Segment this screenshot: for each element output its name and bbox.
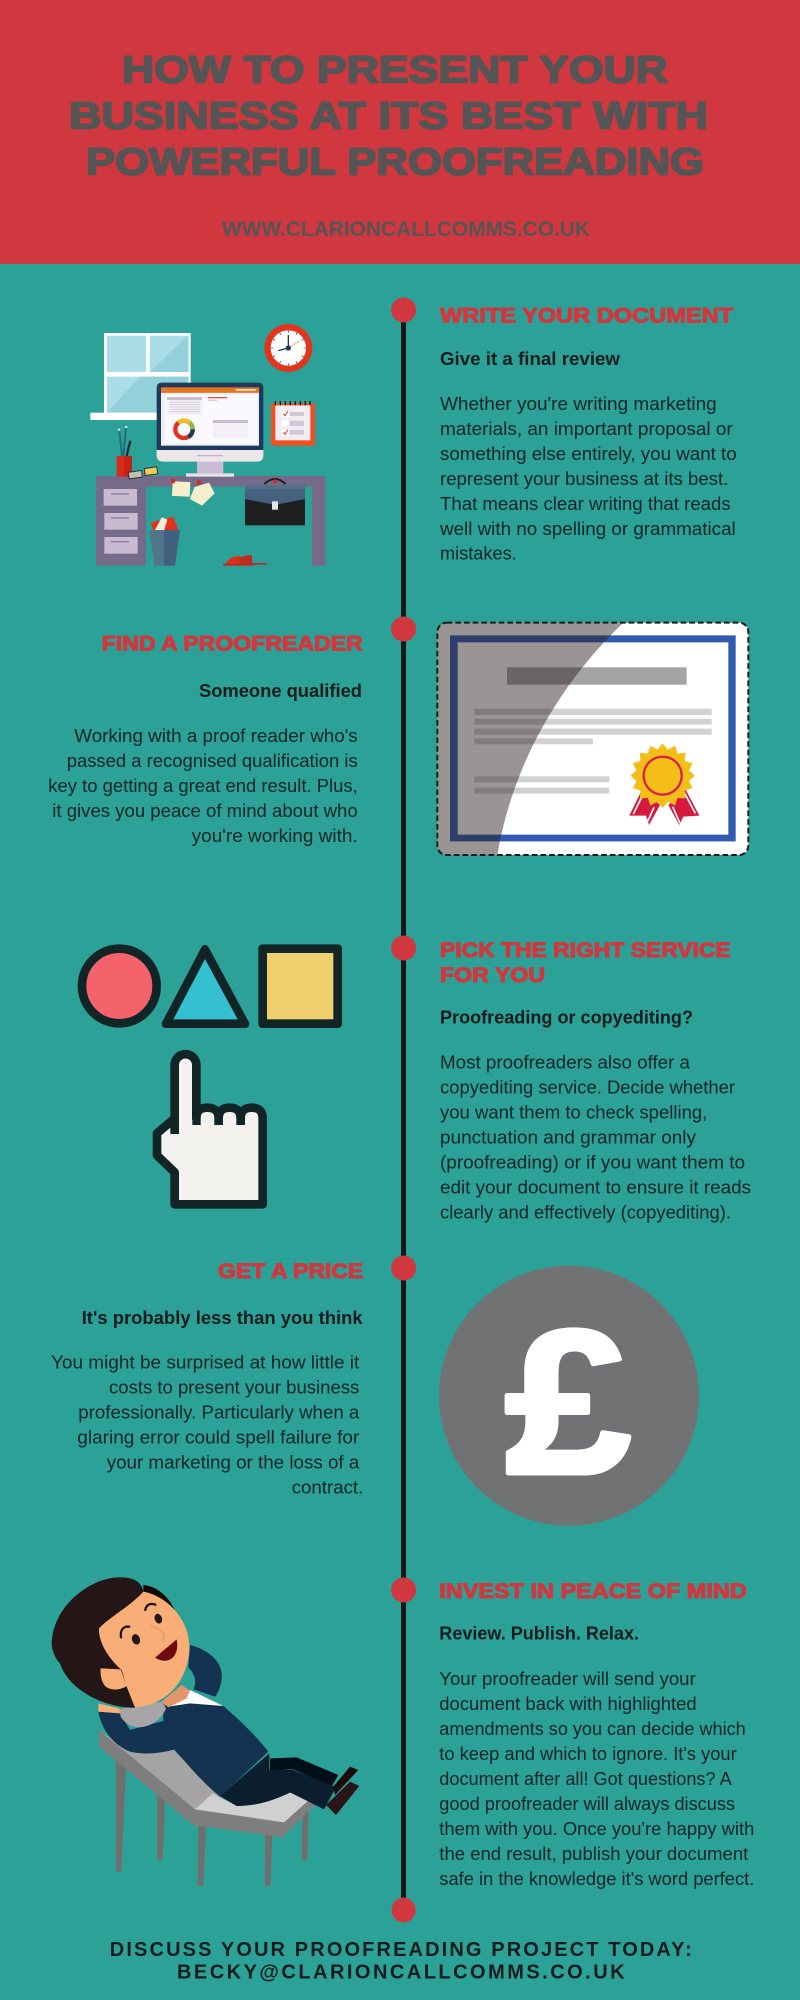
icon: certificate bbox=[437, 623, 748, 855]
icon: relaxed man on chair bbox=[52, 1577, 359, 1886]
heading: PICK THE RIGHT SERVICE bbox=[440, 938, 731, 962]
body text: your marketing or the loss of a bbox=[107, 1451, 360, 1472]
body text: document back with highlighted bbox=[439, 1693, 697, 1714]
body text: to keep and which to ignore. It's your bbox=[439, 1743, 737, 1764]
body text: contract. bbox=[292, 1476, 363, 1497]
window bbox=[90, 333, 191, 420]
header banner bbox=[0, 0, 800, 264]
icon: shapes and pointing hand bbox=[82, 944, 342, 1204]
desk bbox=[96, 476, 325, 566]
certificate border bbox=[450, 635, 736, 841]
body text: Your proofreader will send your bbox=[439, 1668, 696, 1689]
body text: the end result, publish your document bbox=[439, 1843, 749, 1864]
body text: well with no spelling or grammatical bbox=[439, 518, 736, 539]
panel: pick the right service bbox=[440, 938, 751, 1222]
bin bbox=[149, 517, 180, 566]
square shape bbox=[258, 944, 342, 1028]
body text: mistakes. bbox=[440, 542, 517, 564]
briefcase bbox=[245, 479, 305, 525]
body text: you want them to check spelling, bbox=[440, 1101, 707, 1122]
body text: copyediting service. Decide whether bbox=[440, 1076, 735, 1097]
body text: professionally. Particularly when a bbox=[78, 1401, 360, 1422]
sticky notes bbox=[171, 479, 215, 506]
body text: it gives you peace of mind about who bbox=[52, 800, 358, 821]
body text: costs to present your business bbox=[109, 1376, 359, 1397]
head bbox=[52, 1577, 189, 1708]
pen pot and glasses bbox=[117, 426, 158, 479]
subheading: It's probably less than you think bbox=[82, 1307, 363, 1328]
footer call to action: DISCUSS YOUR PROOFREADING PROJECT TODAY: bbox=[110, 1939, 692, 1961]
timeline bbox=[391, 298, 416, 1922]
footer call to action: BECKY@CLARIONCALLCOMMS.CO.UK bbox=[177, 1962, 625, 1984]
body text: key to getting a great end result. Plus, bbox=[48, 775, 358, 796]
body text: represent your business at its best. bbox=[440, 468, 728, 489]
torso and arms bbox=[98, 1645, 268, 1797]
body text: edit your document to ensure it reads bbox=[440, 1176, 751, 1197]
legs and shoes bbox=[220, 1753, 359, 1815]
body text: materials, an important proposal or bbox=[440, 418, 733, 439]
website address: WWW.CLARIONCALLCOMMS.CO.UK bbox=[222, 218, 590, 241]
chair bbox=[99, 1730, 315, 1886]
body text: Most proofreaders also offer a bbox=[440, 1051, 691, 1072]
title bbox=[69, 50, 708, 184]
body text: safe in the knowledge it's word perfect. bbox=[439, 1868, 754, 1889]
body text bbox=[51, 1351, 363, 1497]
slippers bbox=[223, 555, 267, 566]
footer call to action bbox=[110, 1939, 692, 1984]
body text bbox=[439, 393, 737, 564]
clock bbox=[264, 324, 312, 372]
panel: find a proofreader bbox=[48, 632, 363, 846]
body text: good proofreader will always discuss bbox=[439, 1793, 735, 1814]
body text: Working with a proof reader who's bbox=[74, 725, 358, 746]
body text: punctuation and grammar only bbox=[440, 1126, 697, 1147]
title: HOW TO PRESENT YOUR bbox=[122, 50, 668, 92]
body text: amendments so you can decide which bbox=[439, 1718, 746, 1739]
body text: clearly and effectively (copyediting). bbox=[440, 1201, 731, 1222]
subheading: Review. Publish. Relax. bbox=[439, 1622, 639, 1643]
title: POWERFUL PROOFREADING bbox=[86, 142, 704, 184]
body text: glaring error could spell failure for bbox=[77, 1426, 359, 1447]
icon: pound coin bbox=[439, 1266, 699, 1526]
body text: something else entirely, you want to bbox=[440, 443, 737, 464]
rosette seal bbox=[629, 743, 699, 825]
heading: FOR YOU bbox=[440, 963, 545, 987]
icon: office desk illustration bbox=[90, 324, 325, 566]
body text: document after all! Got questions? A bbox=[439, 1768, 732, 1789]
certificate text lines bbox=[474, 709, 712, 794]
calendar bbox=[271, 401, 315, 446]
heading: INVEST IN PEACE OF MIND bbox=[439, 1579, 747, 1603]
subheading: Give it a final review bbox=[440, 348, 621, 369]
body text: Whether you're writing marketing bbox=[440, 393, 717, 414]
monitor bbox=[157, 383, 263, 477]
certificate title bar bbox=[507, 667, 687, 685]
body text: That means clear writing that reads bbox=[440, 493, 731, 514]
subheading: Someone qualified bbox=[199, 680, 362, 701]
heading bbox=[440, 938, 731, 987]
panel: write your document bbox=[439, 304, 737, 564]
heading: FIND A PROOFREADER bbox=[102, 632, 363, 656]
body text bbox=[439, 1668, 754, 1889]
body text: passed a recognised qualification is bbox=[67, 750, 358, 771]
body text: You might be surprised at how little it bbox=[51, 1351, 360, 1372]
body text: (proofreading) or if you want them to bbox=[440, 1151, 745, 1172]
triangle shape bbox=[166, 949, 245, 1024]
icon: pound coin: £ bbox=[505, 1288, 631, 1517]
circle shape bbox=[82, 949, 157, 1023]
body text bbox=[48, 725, 358, 846]
body text bbox=[440, 1051, 751, 1222]
pointing hand bbox=[157, 1054, 263, 1204]
dashed outline bbox=[437, 623, 748, 855]
panel: get a price bbox=[51, 1259, 363, 1497]
panel: invest in peace of mind bbox=[439, 1579, 754, 1889]
shaded overlay bbox=[437, 623, 623, 855]
body text: you're working with. bbox=[192, 825, 358, 846]
body text: them with you. Once you're happy with bbox=[439, 1818, 754, 1839]
title: BUSINESS AT ITS BEST WITH bbox=[69, 96, 708, 138]
subheading: Proofreading or copyediting? bbox=[440, 1006, 693, 1027]
heading: GET A PRICE bbox=[218, 1259, 363, 1283]
heading: WRITE YOUR DOCUMENT bbox=[440, 304, 733, 328]
